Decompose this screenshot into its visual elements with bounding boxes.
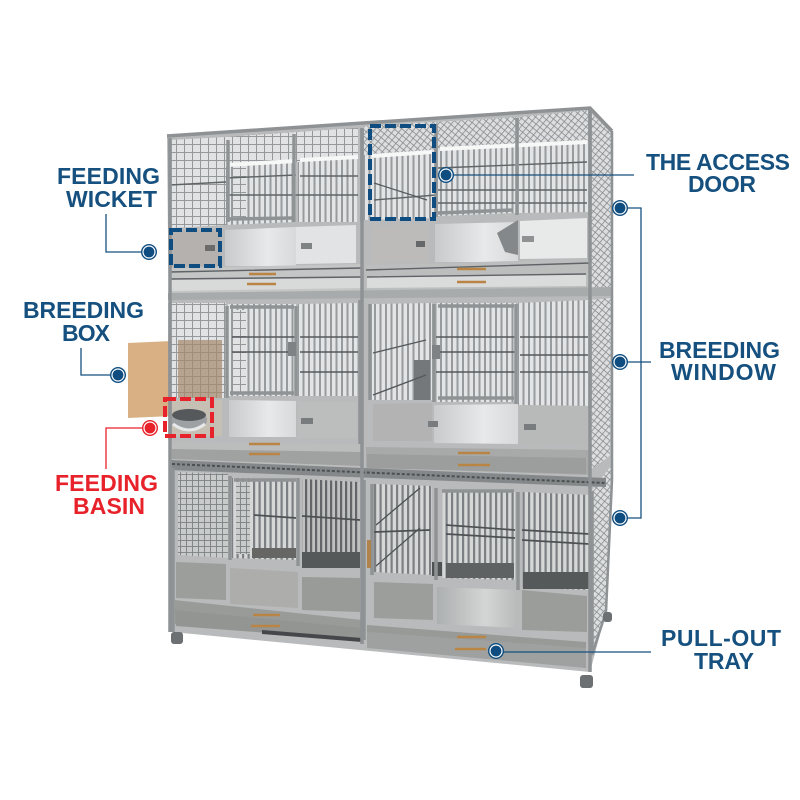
bottom tier cages <box>173 468 592 650</box>
callout: feeding wicket: WICKET <box>66 186 157 212</box>
highlight: feeding basin <box>165 399 212 436</box>
callout: breeding box <box>23 297 144 383</box>
casters <box>171 612 612 688</box>
outer frame <box>167 108 612 672</box>
callout: feeding wicket: FEEDING <box>57 163 160 189</box>
callout: the access door <box>438 149 790 197</box>
callout: feeding wicket <box>57 163 160 260</box>
top tier feed panels <box>170 218 587 267</box>
callout: feeding basin: FEEDING <box>55 470 158 496</box>
callout: breeding window <box>612 200 780 526</box>
bottom tier trays <box>174 600 586 668</box>
middle tier cages <box>170 300 590 446</box>
top tier door frames <box>170 110 590 228</box>
callout: the access door: DOOR <box>688 171 756 197</box>
highlight: access door <box>370 126 434 219</box>
callout: pull-out tray <box>488 625 781 674</box>
bottom tier door frames <box>173 468 592 650</box>
cage frame backing <box>167 108 612 672</box>
middle tier trays <box>170 442 606 487</box>
callout: the access door: THE ACCESS <box>646 149 790 175</box>
right side mesh <box>590 112 611 650</box>
breeding box wood panel <box>128 341 172 418</box>
feeding basin bowl <box>171 409 207 431</box>
callout: breeding window: BREEDING <box>659 337 780 363</box>
callout: feeding basin: BASIN <box>73 493 145 519</box>
callout: feeding basin <box>55 420 158 519</box>
bottom tier feed panels <box>176 562 587 632</box>
middle tier door frames <box>170 300 590 446</box>
callout: breeding box: BOX <box>62 320 111 346</box>
top tier cages <box>170 110 590 228</box>
callout: pull-out tray: PULL-OUT <box>661 625 781 651</box>
callout: breeding window: WINDOW <box>671 359 776 385</box>
highlight: feeding wicket <box>171 230 220 266</box>
top tier trays <box>168 259 612 300</box>
callout: pull-out tray: TRAY <box>694 648 754 674</box>
middle tier feed panels <box>172 400 587 446</box>
callout: breeding box: BREEDING <box>23 297 144 323</box>
cage illustration <box>128 108 612 688</box>
